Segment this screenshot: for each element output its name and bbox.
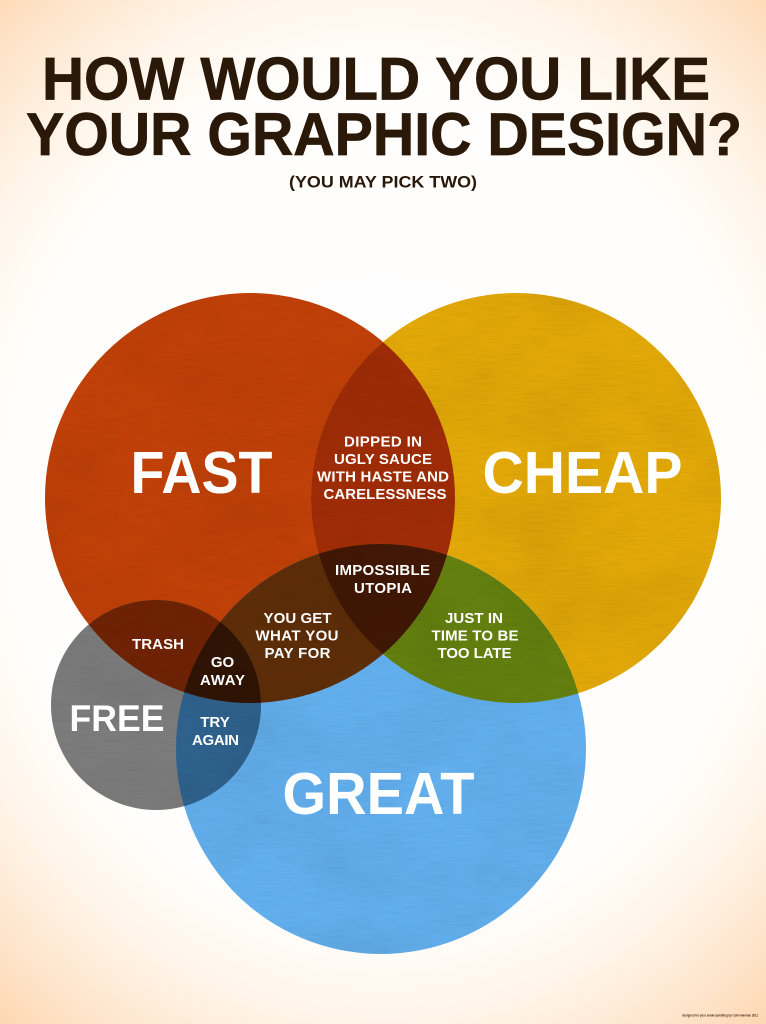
overlap: fast and free [88, 600, 261, 703]
circle: fast [45, 293, 455, 703]
overlap: free and great [176, 622, 261, 806]
text: fast and cheap: WITH HASTE AND [317, 468, 449, 486]
subtitle: (YOU MAY PICK TWO) [289, 172, 477, 192]
overlap: cheap and great [320, 544, 578, 703]
text: impossible utopia [335, 562, 430, 597]
title [26, 46, 742, 168]
text: fast and cheap: CARELESSNESS [324, 486, 446, 503]
text: try again: AGAIN [192, 732, 239, 749]
text: cheap and great: TIME TO BE [432, 628, 518, 644]
text: cheap and great: TOO LATE [438, 645, 512, 662]
text: fast and cheap: UGLY SAUCE [334, 451, 432, 468]
text: cheap and great: JUST IN [445, 610, 503, 627]
text: fast and great: YOU GET [264, 610, 332, 627]
label: fast: FAST [130, 440, 272, 506]
overlap: fast, free and great [184, 622, 261, 703]
overlap: fast and great [220, 544, 447, 703]
text: go away [200, 654, 245, 689]
label: free: FREE [70, 698, 164, 739]
text: cheap and great [432, 610, 518, 662]
text: fast and cheap: DIPPED IN [344, 434, 422, 450]
label: cheap: CHEAP [482, 440, 682, 506]
text: try again: TRY [200, 714, 230, 731]
overlap: fast and cheap [311, 342, 455, 555]
circle: free [51, 600, 261, 810]
venn diagram [40, 285, 730, 960]
text: fast and great [256, 610, 338, 662]
text: impossible utopia: IMPOSSIBLE [335, 562, 430, 579]
overlap: fast, cheap and great [318, 544, 447, 654]
text: go away: AWAY [200, 672, 245, 689]
text: try again [192, 714, 239, 749]
text: trash: TRASH [132, 636, 184, 653]
label: great: GREAT [282, 761, 474, 827]
title: HOW WOULD YOU LIKE [42, 46, 710, 112]
circle: cheap [311, 293, 721, 703]
circle: great [176, 544, 586, 954]
text: fast and great: PAY FOR [264, 645, 331, 662]
text: impossible utopia: UTOPIA [354, 580, 412, 597]
title: YOUR GRAPHIC DESIGN? [26, 101, 742, 168]
text: fast and great: WHAT YOU [256, 628, 338, 644]
text: fast and cheap [317, 434, 449, 503]
paper texture [40, 285, 730, 960]
text: go away: GO [211, 654, 234, 671]
